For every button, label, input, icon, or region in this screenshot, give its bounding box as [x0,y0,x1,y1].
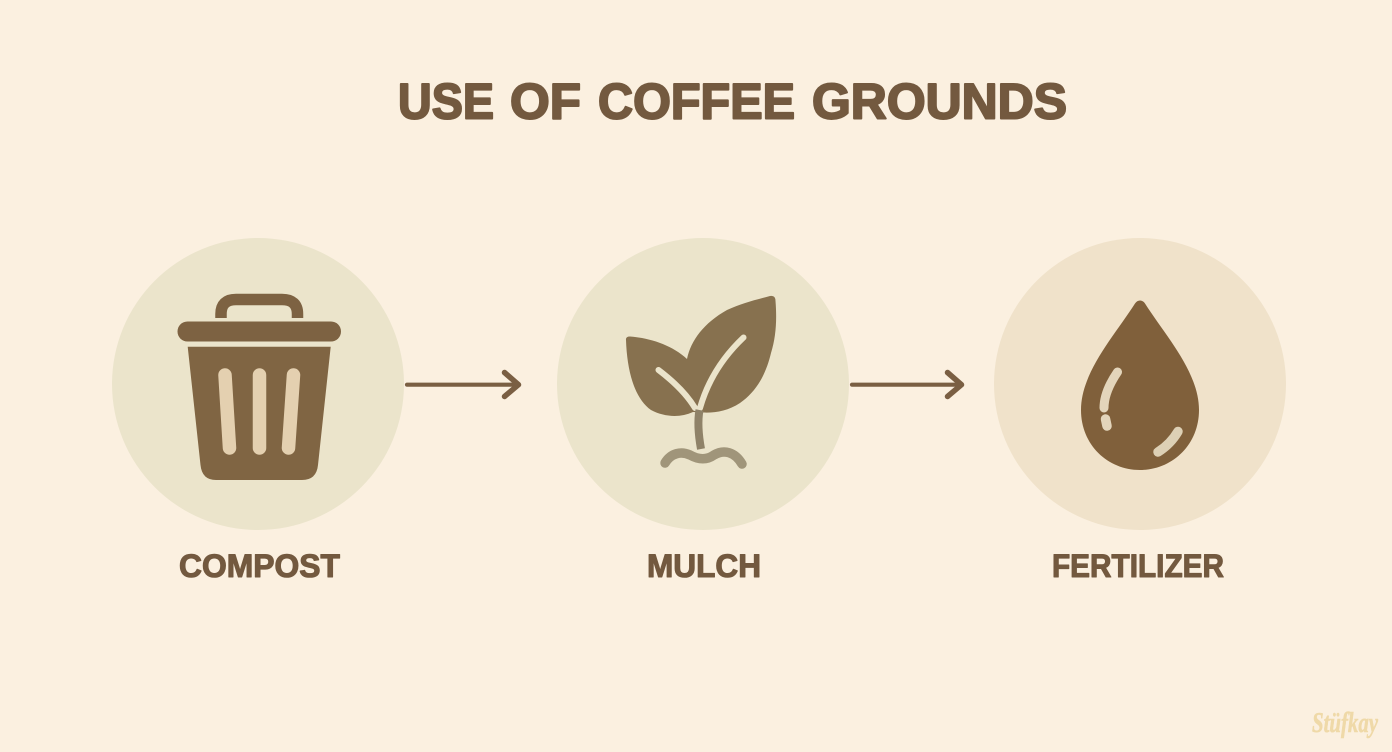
arrow: compost to mulch [407,372,518,396]
panel: mulch [557,238,849,584]
panel: compost [112,238,404,584]
arrow: mulch to fertilizer [852,372,962,396]
icon: trash bin [178,300,341,480]
title: USE [398,74,494,130]
title: COFFEE [598,74,795,130]
title: GROUNDS [812,74,1067,130]
compost circle [112,238,404,530]
label: mulch: MULCH [647,548,761,584]
label: fertilizer: FERTILIZER [1052,548,1224,584]
panel: fertilizer [994,238,1286,584]
mulch circle [557,238,849,530]
icon: sprout [626,296,776,464]
fertilizer circle [994,238,1286,530]
title: OF [510,74,581,130]
label: compost: COMPOST [179,548,340,584]
icon: water drop [1081,300,1199,470]
